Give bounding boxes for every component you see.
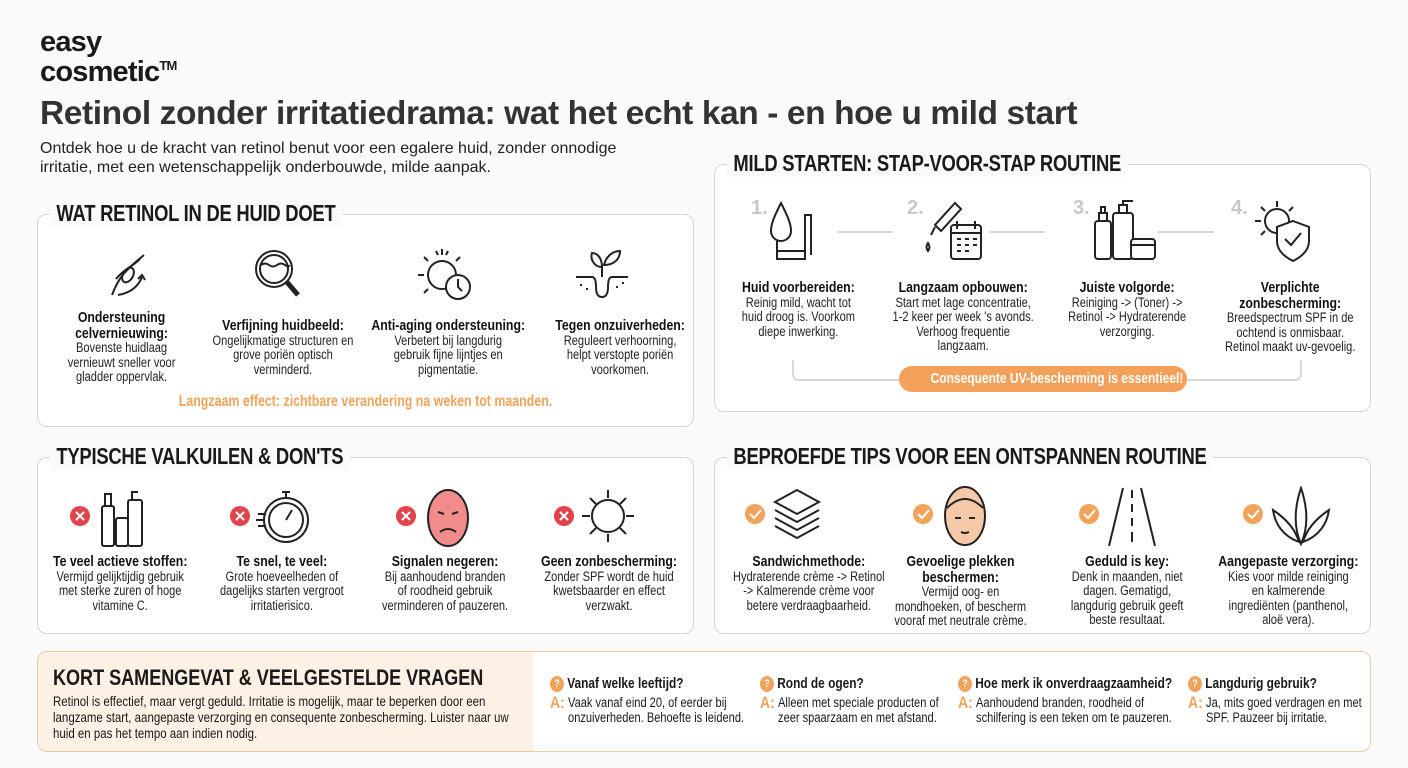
text: col 2: Ongelijkmatige structuren en grove poriën optisch verminderd. — [213, 332, 353, 376]
title: Retinol zonder irritatiedrama: wat het echt kan - en hoe u mild start — [40, 95, 1077, 132]
icon: sun with x — [554, 490, 634, 542]
panel: wat retinol doet — [37, 214, 694, 427]
faq 2: Alleen met speciale producten of zeer spaarzaam en met afstand. — [778, 695, 939, 724]
text: col 2: Gevoelige plekken — [907, 553, 1015, 570]
icon: road check — [1079, 488, 1156, 546]
text: col 3: Geduld is key: — [1085, 553, 1169, 570]
text: col 2 — [894, 553, 1027, 628]
text: col 1: celvernieuwing: — [76, 324, 168, 342]
faq 4: Langdurig gebruik? — [1205, 676, 1317, 692]
connector lines — [792, 231, 1302, 381]
text: col 3: Signalen negeren: — [392, 553, 498, 570]
subtitle: Ontdek hoe u de kracht van retinol benut voor een egalere huid, zonder onnodige — [40, 140, 616, 157]
icon: aloe check — [1243, 486, 1330, 546]
text: col 2: Vermijd oog- en mondhoeken, of bescherm vooraf met neutrale crème. — [895, 584, 1027, 628]
icon: face check — [913, 486, 986, 546]
text: step 3: Reiniging -> (Toner) -> Retinol -> Hydraterende verzorging. — [1069, 294, 1186, 338]
icon: dropper calendar — [926, 202, 982, 260]
summary text: Retinol is effectief, maar vergt geduld. Irritatie is mogelijk, maar te beperken door een langzame start, aangepaste verzorging en consequente zonbescherming. Luister naar uw huid en pas het tempo aan indien nodig. — [53, 693, 509, 741]
text: col 4 — [1218, 553, 1358, 627]
icon: cell renewal — [111, 254, 146, 296]
step 1: 1. — [751, 197, 768, 219]
text: step 1: Reinig mild, wacht tot huid droog is. Voorkom diepe inwerking. — [741, 294, 855, 338]
text: step 4: Breedspectrum SPF in de ochtend is onmisbaar. Retinol maakt uv-gevoelig. — [1225, 310, 1355, 354]
text: col 1: Sandwichmethode: — [753, 553, 865, 570]
text: col 3: Denk in maanden, niet dagen. Gematigd, langdurig gebruik geeft beste resultaat. — [1071, 568, 1183, 627]
callout pill — [899, 366, 1187, 392]
faq 2: Rond de ogen? — [777, 676, 864, 692]
step 4: 4. — [1231, 197, 1248, 219]
text: step 4: zonbescherming: — [1239, 294, 1341, 312]
icon: bottles — [1094, 200, 1156, 260]
text: col 4 — [555, 317, 685, 376]
text: col 4: Zonder SPF wordt de huid kwetsbaarder en effect verzwakt. — [544, 568, 674, 612]
faq 4: A: — [1188, 693, 1203, 712]
summary block — [38, 652, 533, 751]
text: col 3: Anti-aging ondersteuning: — [371, 317, 525, 334]
faq 2: ? — [764, 678, 770, 690]
faq 3: ? — [962, 678, 968, 690]
callout pill: Consequente UV-bescherming is essentieel! — [931, 370, 1183, 387]
text: step 1: Huid voorbereiden: — [742, 279, 854, 296]
panel: valkuilen — [37, 457, 694, 634]
text: col 1: Hydraterende crème -> Retinol -> Kalmerende crème voor betere verdraagbaarheid. — [733, 568, 885, 612]
text: col 3: Bij aanhoudend branden of roodheid gebruik verminderen of pauzeren. — [382, 568, 508, 612]
summary heading: KORT SAMENGEVAT & VEELGESTELDE VRAGEN — [53, 665, 483, 690]
text: col 3 — [371, 317, 525, 377]
text: col 4: Tegen onzuiverheden: — [556, 317, 685, 334]
text: col 2: Grote hoeveelheden of dagelijks starten vergroot irritatierisico. — [220, 568, 344, 612]
faq 2: A: — [760, 693, 775, 712]
step 3: 3. — [1073, 197, 1090, 219]
note: Langzaam effect: zichtbare verandering na weken tot maanden. — [179, 393, 552, 410]
faq 1: A: — [550, 693, 565, 712]
faq 2 — [760, 676, 939, 725]
faq 1: Vanaf welke leeftijd? — [567, 676, 684, 692]
logo: cosmeticTM — [40, 56, 176, 88]
icon: bottles with x — [70, 491, 143, 547]
icon: plant skin — [576, 250, 628, 298]
text: col 3: Verbetert bij langdurig gebruik fijne lijntjes en pigmentatie. — [394, 332, 502, 376]
icon: layers check — [745, 488, 821, 540]
text: col 2: Verfijning huidbeeld: — [222, 317, 344, 334]
text: col 1 — [68, 309, 176, 384]
faq 4: Ja, mits goed verdragen en met SPF. Pauzeer bij irritatie. — [1206, 695, 1362, 724]
faq 3 — [958, 676, 1172, 725]
text: col 1: Bovenste huidlaag vernieuwt sneller voor gladder oppervlak. — [68, 340, 176, 384]
text: col 4: Geen zonbescherming: — [541, 553, 677, 570]
text: col 1: Te veel actieve stoffen: — [53, 553, 187, 570]
text: step 4: Verplichte — [1261, 279, 1319, 296]
text: col 4: Kies voor milde reiniging en kalmerende ingrediënten (panthenol, aloë vera). — [1228, 568, 1348, 627]
subtitle — [40, 140, 616, 176]
faq 4: ? — [1192, 678, 1198, 690]
text: step 3: Juiste volgorde: — [1080, 279, 1175, 296]
subtitle: irritatie, met een wetenschappelijk onderbouwde, milde aanpak. — [40, 159, 491, 176]
text: step 2: Langzaam opbouwen: — [898, 279, 1028, 296]
faq 4 — [1188, 676, 1362, 725]
faq 1: Vaak vanaf eind 20, of eerder bij onzuiverheden. Behoefte is leidend. — [568, 695, 744, 724]
heading: BEPROEFDE TIPS VOOR EEN ONTSPANNEN ROUTINE — [733, 443, 1207, 469]
icon: magnifier — [255, 250, 300, 297]
icon: drop towel — [770, 201, 812, 260]
panel: tips — [714, 457, 1371, 634]
panel: samenvatting & faq — [37, 651, 1371, 752]
logo — [40, 26, 176, 88]
panel: mild starten — [714, 164, 1371, 412]
text: col 1: Ondersteuning — [78, 309, 166, 326]
logo: easy — [40, 26, 101, 58]
faq 3: Aanhoudend branden, roodheid of schilfering is een teken om te pauzeren. — [976, 695, 1172, 724]
heading: MILD STARTEN: STAP-VOOR-STAP ROUTINE — [733, 150, 1121, 176]
faq 1 — [550, 676, 744, 724]
text: step 2: Start met lage concentratie, 1-2 keer per week 's avonds. Verhoog frequentie langzaam. — [892, 294, 1034, 353]
text: col 4: Aangepaste verzorging: — [1218, 553, 1358, 570]
text: col 4: Reguleert verhoorning, helpt verstopte poriën voorkomen. — [564, 332, 677, 376]
icon: sun clock — [418, 249, 471, 300]
text: step 4 — [1225, 279, 1355, 354]
text: col 2: beschermen: — [923, 568, 999, 586]
icon: stopwatch with x — [230, 491, 309, 543]
faq 3: A: — [958, 693, 973, 712]
icon: sun shield — [1255, 201, 1310, 262]
icon: red face with x — [396, 489, 469, 547]
heading: WAT RETINOL IN DE HUID DOET — [56, 200, 335, 226]
text: col 1: Vermijd gelijktijdig gebruik met sterke zuren of hoge vitamine C. — [56, 568, 184, 612]
faq 1: ? — [554, 678, 560, 690]
text: col 2: Te snel, te veel: — [237, 553, 327, 570]
step 2: 2. — [907, 197, 924, 219]
heading: TYPISCHE VALKUILEN & DON'TS — [56, 443, 343, 469]
faq 3: Hoe merk ik onverdraagzaamheid? — [975, 676, 1172, 692]
